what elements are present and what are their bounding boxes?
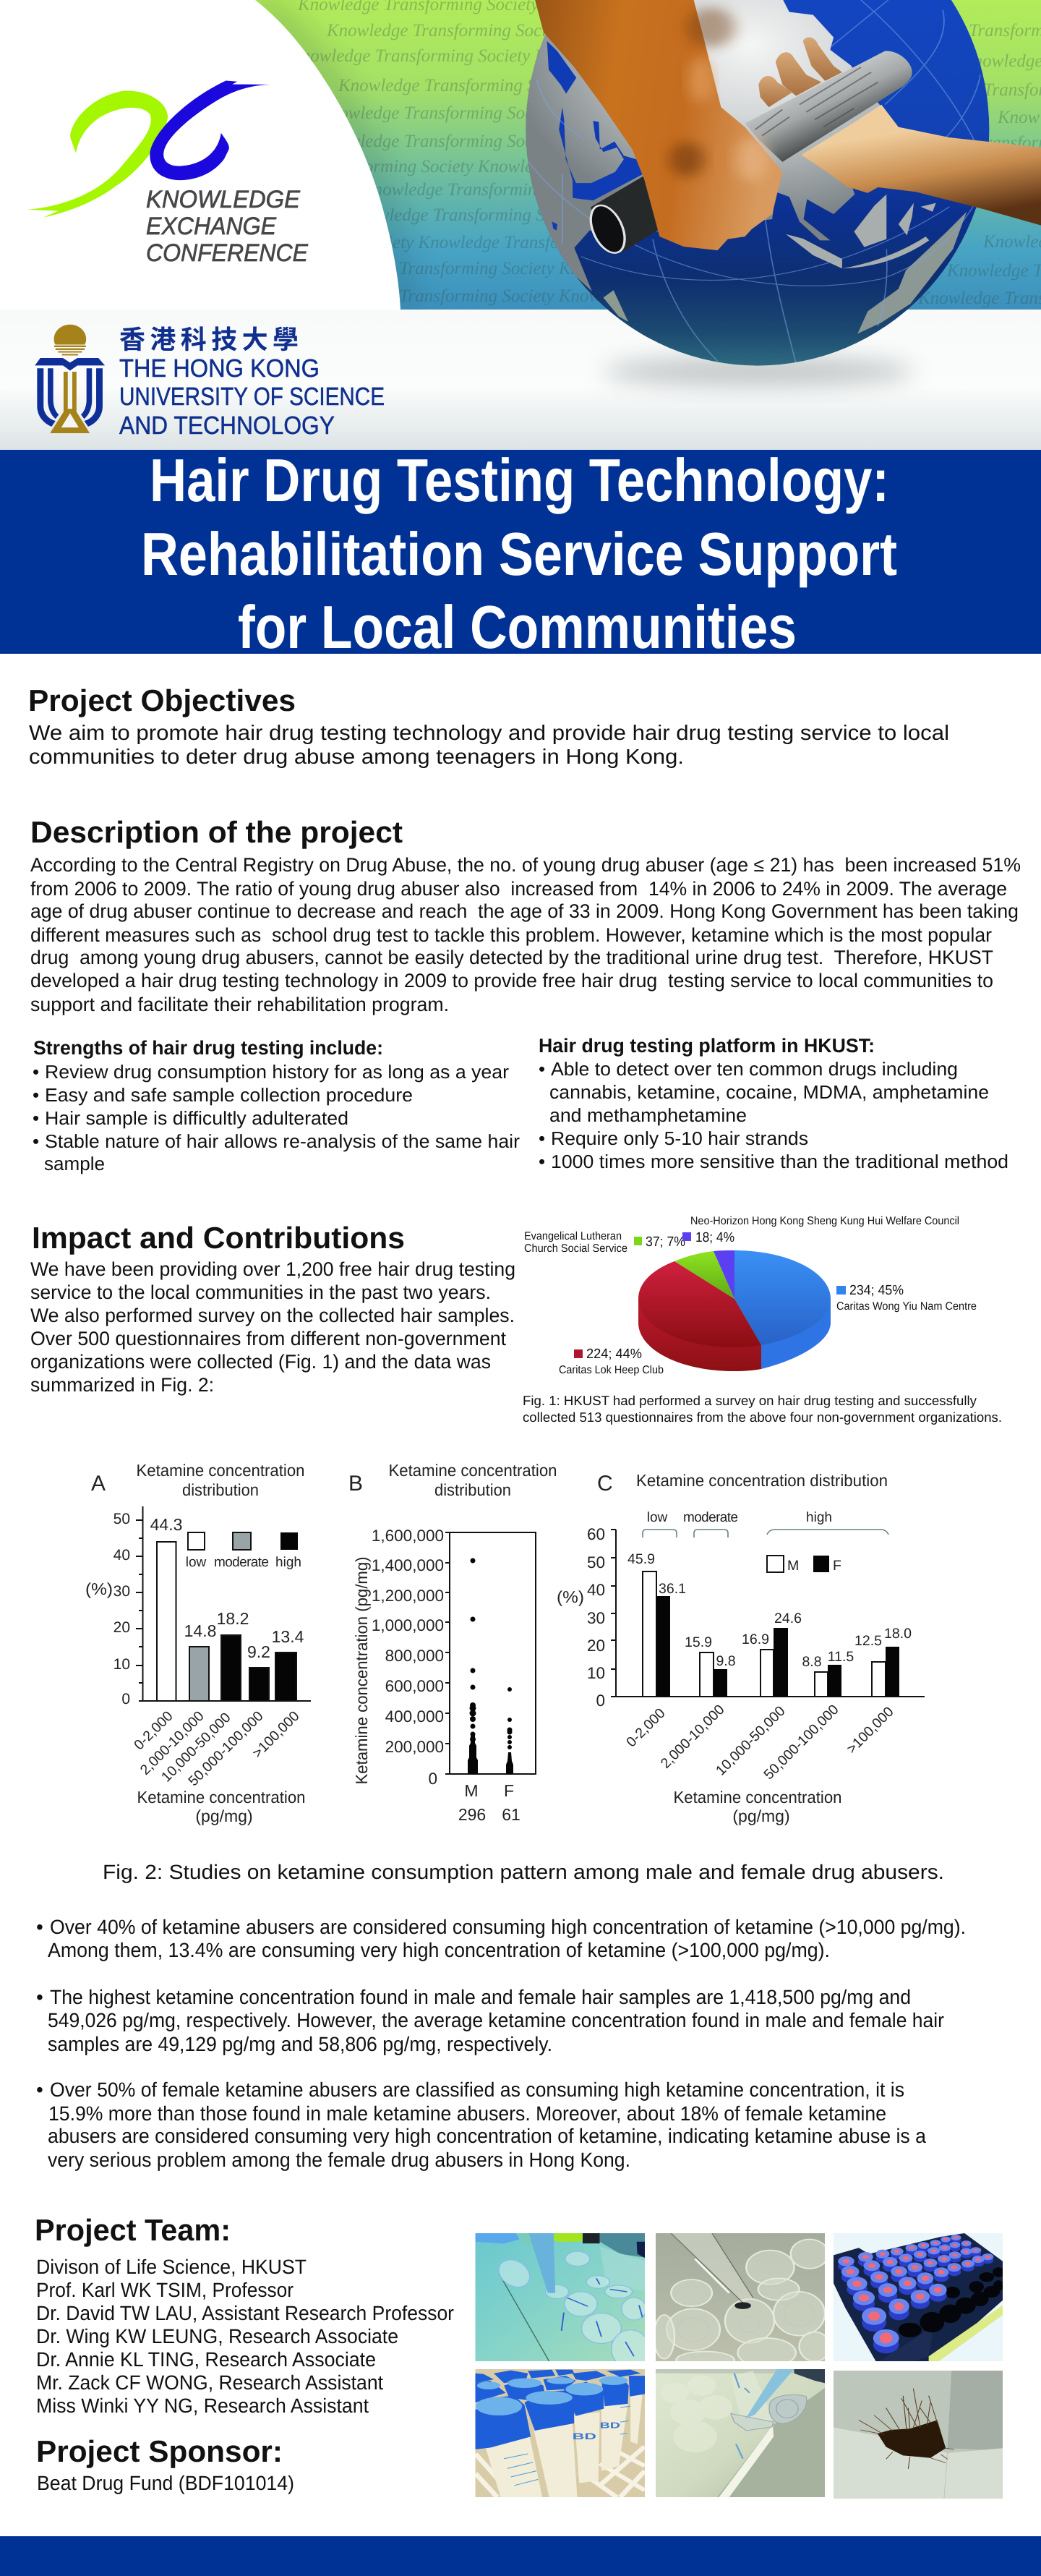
chart A y ticks: 50: [113, 1511, 130, 1527]
chart B y ticks: [372, 1527, 444, 1788]
HKUST name: [119, 325, 385, 440]
chart C brackets: [643, 1530, 888, 1538]
section: project objectives: [28, 683, 949, 769]
section: impact and contributions: Over 500 questionnaires from different non-government: [30, 1328, 506, 1349]
panel: hair drug testing platform in HKUST: and methamphetamine: [549, 1104, 747, 1126]
pie labels: Church Social Service: [524, 1242, 627, 1255]
photo: hair clump on white paper: [834, 2371, 1003, 2499]
chart A legend: [186, 1532, 301, 1570]
pie labels: 234; 45%: [849, 1283, 904, 1298]
chart B y title: Ketamine concentration (pg/mg): [352, 1556, 371, 1785]
section: description of the project: drug among young drug abusers, cannot be easily detected by the traditional urine drug test. Therefore, HKUST: [30, 947, 993, 968]
project team: Miss Winki YY NG, Research Assistant: [36, 2394, 369, 2417]
chart B y ticks: 1,600,000: [372, 1527, 444, 1545]
pie labels: 224; 44%: [586, 1347, 642, 1362]
chart C values: 24.6: [774, 1611, 802, 1626]
project team: Divison of Life Science, HKUST: [36, 2256, 307, 2278]
project team: [35, 2213, 454, 2417]
chart B title: Ketamine concentration: [389, 1461, 557, 1480]
pie labels: Caritas Wong Yiu Nam Centre: [836, 1300, 977, 1313]
chart C female bars: [656, 1596, 899, 1697]
figure 1 caption: collected 513 questionnaires from the above four non-government organizations.: [523, 1409, 1002, 1425]
chart C legend: [767, 1556, 841, 1574]
photo: blue capped centrifuge tubes: BD: [573, 2431, 596, 2441]
findings bullet 2: •: [36, 1986, 43, 2008]
chart A x title: [137, 1788, 305, 1825]
chart A legend: low: [186, 1555, 207, 1570]
panel: strengths of hair drug testing: Easy and safe sample collection procedure: [45, 1084, 413, 1106]
right hand fingers: [758, 37, 842, 107]
chart C x categories: [623, 1702, 897, 1783]
section: impact and contributions: We also performed survey on the collected hair samples.: [30, 1305, 515, 1326]
panel: strengths of hair drug testing: •: [33, 1084, 39, 1106]
title: [141, 446, 897, 661]
section: description of the project: [30, 815, 1021, 1015]
section: description of the project: According to the Central Registry on Drug Abuse, the no. of young drug abuser (age ≤ 21) has been increased 51%: [30, 854, 1021, 876]
photo: dark hair sample in tube caps: [656, 2233, 825, 2361]
HKUST name: UNIVERSITY OF SCIENCE: [119, 383, 385, 411]
chart C y ticks: [557, 1525, 605, 1710]
project sponsor: [36, 2434, 294, 2494]
globe land masses: [520, 0, 967, 333]
chart C y ticks: 20: [587, 1637, 605, 1655]
globe shadow: [604, 357, 914, 386]
chart C y ticks: 60: [587, 1525, 605, 1543]
findings bullet 1: [36, 1916, 966, 1961]
findings bullet 2: [36, 1986, 944, 2055]
chart C bracket labels: high: [806, 1510, 832, 1525]
chart B y ticks: 1,200,000: [372, 1587, 444, 1605]
section: description of the project: from 2006 to 2009. The ratio of young drug abuser also increased from 14% in 2006 to 24% in 2009. The average: [30, 878, 1007, 900]
panel: strengths of hair drug testing: Review drug consumption history for as long as a year: [45, 1061, 509, 1083]
gradient panel with slogan texture: Knowledge Transforming: [361, 180, 546, 200]
chart C axes: [611, 1530, 925, 1697]
pie chart: questionnaires by organization: [524, 1215, 977, 1376]
section: impact and contributions: We have been providing over 1,200 free hair drug testing: [30, 1258, 515, 1280]
chart B title: distribution: [434, 1480, 511, 1499]
chart A values: [150, 1515, 304, 1661]
logo brush strokes: [27, 81, 270, 218]
panel: hair drug testing platform in HKUST: •: [539, 1151, 545, 1172]
chart C x categories: >100,000: [844, 1704, 897, 1757]
chart B x labels: 296: [458, 1805, 486, 1824]
chart C legend: F: [833, 1558, 841, 1574]
chart C values: 11.5: [828, 1649, 854, 1665]
findings bullet 1: •: [36, 1916, 43, 1938]
chart B y ticks: 1,000,000: [372, 1616, 444, 1634]
project team: Dr. Annie KL TING, Research Associate: [36, 2348, 376, 2371]
gradient panel with slogan texture: Knowledge Transforming Society Knowledge: [317, 103, 645, 123]
chart B title: [389, 1461, 557, 1499]
slice: Caritas Wong Yiu Nam Centre: [734, 1250, 831, 1345]
chart A y ticks: (%): [85, 1579, 113, 1598]
logo wordmark: CONFERENCE: [146, 239, 308, 267]
chart A x title: (pg/mg): [195, 1807, 253, 1825]
chart C legend: M: [787, 1558, 799, 1574]
pie labels: Neo-Horizon Hong Kong Sheng Kung Hui Welfare Council: [690, 1215, 959, 1227]
chart B y ticks: 400,000: [385, 1707, 444, 1726]
photo: pipette adding liquid to tube cap: [656, 2369, 825, 2497]
chart B y ticks: 800,000: [385, 1647, 444, 1665]
globe with hands passing a baton: [520, 0, 1041, 366]
chart C y ticks: 40: [587, 1581, 605, 1599]
chart C values: 12.5: [854, 1633, 882, 1649]
pie labels: [524, 1215, 977, 1376]
figure 1 caption: Fig. 1: HKUST had performed a survey on hair drug testing and successfully: [523, 1393, 977, 1408]
chart C x title: (pg/mg): [732, 1807, 790, 1825]
pie side walls: [638, 1299, 831, 1371]
section: impact and contributions: summarized in Fig. 2:: [30, 1374, 214, 1396]
chart A title: distribution: [182, 1480, 259, 1499]
panel: strengths of hair drug testing: Hair sample is difficultly adulterated: [45, 1107, 348, 1129]
slice: Evangelical Lutheran: [674, 1251, 734, 1299]
chart A x categories: 0-2,000: [131, 1708, 176, 1753]
slice: Caritas Lok Heep Club: [638, 1261, 761, 1347]
pie labels: Caritas Lok Heep Club: [559, 1364, 664, 1376]
chart C x categories: 10,000-50,000: [713, 1703, 789, 1778]
panel: strengths of hair drug testing: •: [33, 1061, 39, 1083]
globe sphere: [526, 0, 989, 366]
chart A y ticks: 0: [121, 1691, 130, 1707]
gradient panel with slogan texture: Knowledge Transforming Society: [326, 21, 568, 40]
conference logo: [27, 81, 308, 267]
title: Hair Drug Testing Technology:: [150, 446, 889, 514]
globe grid lines: [526, 0, 984, 364]
slice: Neo-Horizon: [714, 1250, 734, 1299]
findings bullet 2: samples are 49,129 pg/mg and 58,806 pg/mg, respectively.: [48, 2033, 552, 2055]
pie labels: 18; 4%: [695, 1230, 734, 1245]
chart C x title: Ketamine concentration: [674, 1788, 841, 1807]
female data points: [506, 1687, 513, 1774]
findings bullet 3: very serious problem among the female drug abusers in Hong Kong.: [48, 2149, 630, 2171]
chart C: distribution by gender: [557, 1471, 925, 1825]
HKUST name: THE HONG KONG: [119, 354, 320, 383]
chart C bracket labels: moderate: [683, 1510, 738, 1525]
pie labels: Evangelical Lutheran: [524, 1230, 622, 1242]
gradient panel with slogan texture: Transforming Society Knowledge: [399, 259, 640, 278]
chart A values: 44.3: [150, 1515, 182, 1534]
chart B y ticks: 1,400,000: [372, 1556, 444, 1574]
findings bullet 3: abusers are considered consuming very high concentration of ketamine, indicating ketamine abuse is a: [48, 2125, 926, 2147]
gradient panel with slogan texture: Know: [997, 108, 1040, 127]
chart A y ticks: 40: [113, 1547, 130, 1564]
chart B: scatter by gender: [348, 1461, 557, 1824]
logo wordmark: KNOWLEDGE: [146, 186, 300, 213]
chart C values: 45.9: [627, 1551, 655, 1567]
gradient panel with slogan texture: Knowledge Transforming Society: [346, 205, 588, 225]
HKUST emblem: [35, 325, 105, 433]
gradient panel with slogan texture: Transforming Society Knowledge: [399, 286, 640, 306]
section: project objectives: communities to deter drug abuse among teenagers in Hong Kong.: [29, 746, 684, 769]
panel: strengths of hair drug testing: Strengths of hair drug testing include:: [33, 1037, 383, 1059]
figure 2 caption: Fig. 2: Studies on ketamine consumption pattern among male and female drug abusers.: [103, 1861, 944, 1883]
chart C x categories: 0-2,000: [623, 1705, 669, 1750]
chart A: overall ketamine concentration distribution: [85, 1461, 311, 1825]
chart A y ticks: 20: [113, 1619, 130, 1636]
chart C x categories: 2,000-10,000: [658, 1702, 728, 1772]
logo wordmark: [146, 186, 308, 267]
chart C x title: [674, 1788, 841, 1825]
panel: hair drug testing platform in HKUST: •: [539, 1127, 545, 1149]
panel: hair drug testing platform in HKUST: Able to detect over ten common drugs including: [551, 1058, 958, 1080]
chart A y ticks: [85, 1511, 130, 1707]
section: impact and contributions: Impact and Contributions: [32, 1221, 405, 1255]
chart B x labels: 61: [502, 1805, 520, 1824]
chart A x categories: 50,000-100,000: [185, 1708, 267, 1789]
chart C values: 15.9: [685, 1634, 712, 1650]
section: project objectives: We aim to promote hair drug testing technology and provide hair drug testing service to local: [29, 722, 949, 745]
project sponsor: Beat Drug Fund (BDF101014): [37, 2472, 294, 2494]
chart B letter: B: [348, 1472, 363, 1496]
photo grid: laboratory samples: [476, 2233, 1005, 2499]
panel: hair drug testing platform in HKUST: [539, 1035, 1008, 1172]
title: for Local Communities: [238, 593, 797, 661]
figure 1 caption: [523, 1393, 1002, 1425]
chart C letter: C: [597, 1472, 613, 1496]
chart A legend: moderate: [214, 1555, 269, 1570]
gradient panel with slogan texture: Knowledge Transforming Society Knowledge: [288, 46, 616, 66]
chart C values: 8.8: [802, 1654, 822, 1670]
chart C values: 16.9: [742, 1632, 769, 1647]
chart A axes: [136, 1506, 311, 1701]
section: description of the project: Description of the project: [30, 815, 403, 849]
section: description of the project: developed a hair drug testing technology in 2009 to provide free hair drug testing service to local communities to: [30, 970, 993, 991]
chart C y ticks: 0: [596, 1692, 605, 1710]
gradient panel with slogan texture: Transforming Society Knowledge: [318, 157, 559, 176]
title banner: [0, 446, 1041, 661]
chart A legend: high: [275, 1555, 301, 1570]
photo: blue vials in rack: [834, 2233, 1003, 2361]
chart A x title: Ketamine concentration: [137, 1788, 305, 1807]
chart A title: [136, 1461, 305, 1499]
title: Rehabilitation Service Support: [141, 520, 897, 588]
gradient panel with slogan texture: [246, 0, 1041, 310]
chart B y ticks: 200,000: [385, 1738, 444, 1756]
chart A title: Ketamine concentration: [136, 1461, 305, 1480]
chart C values: 36.1: [659, 1581, 686, 1597]
chart C values: 9.8: [716, 1653, 736, 1669]
panel: strengths of hair drug testing: Stable nature of hair allows re-analysis of the same hair: [45, 1130, 520, 1152]
section: impact and contributions: organizations were collected (Fig. 1) and the data was: [30, 1351, 491, 1373]
chart C bracket labels: low: [647, 1510, 668, 1525]
footer band: [0, 2536, 1041, 2576]
panel: hair drug testing platform in HKUST: cannabis, ketamine, cocaine, MDMA, amphetamine: [549, 1081, 989, 1103]
chart B x labels: M: [464, 1781, 479, 1800]
panel: hair drug testing platform in HKUST: •: [539, 1058, 545, 1080]
section: impact and contributions: service to the local communities in the past two years.: [30, 1281, 491, 1303]
photo: pipette over clear caps on teal: [476, 2233, 645, 2361]
HKUST name: AND TECHNOLOGY: [119, 411, 335, 440]
findings bullet 3: Over 50% of female ketamine abusers are classified as consuming high ketamine concentration, it is: [50, 2078, 904, 2101]
gradient panel with slogan texture: Knowledge Transforming Society Knowledge: [338, 76, 665, 95]
findings bullet 2: 549,026 pg/mg, respectively. However, the average ketamine concentration found in male and female hair: [48, 2009, 944, 2031]
chart A values: 13.4: [272, 1627, 304, 1646]
panel: strengths of hair drug testing: •: [33, 1130, 39, 1152]
photo: blue capped centrifuge tubes: BD: [600, 2421, 620, 2430]
chart A values: 18.2: [217, 1609, 249, 1628]
findings bullet 3: •: [36, 2078, 43, 2101]
panel: strengths of hair drug testing: [33, 1037, 520, 1174]
panel: hair drug testing platform in HKUST: Hair drug testing platform in HKUST:: [539, 1035, 875, 1057]
project team: Dr. David TW LAU, Assistant Research Professor: [36, 2302, 454, 2324]
gradient panel with slogan texture: Knowledge Transforming Society: [317, 132, 560, 151]
chart A letter: A: [91, 1472, 106, 1496]
pie labels: 37; 7%: [646, 1234, 685, 1250]
header artwork: [0, 0, 1041, 450]
panel: strengths of hair drug testing: •: [33, 1107, 39, 1129]
chart B x labels: [458, 1781, 520, 1824]
chart C y ticks: 30: [587, 1609, 605, 1627]
chart B frame: [445, 1532, 536, 1774]
chart A values: 14.8: [184, 1621, 216, 1640]
findings bullet 3: [36, 2078, 926, 2171]
chart A y ticks: 10: [113, 1656, 130, 1673]
section: project objectives: Project Objectives: [28, 683, 296, 717]
chart C values: 18.0: [884, 1626, 912, 1642]
HKUST name: 香港科技大學: [119, 325, 299, 354]
project sponsor: Project Sponsor:: [36, 2434, 283, 2468]
project team: Project Team:: [35, 2213, 231, 2247]
section: impact and contributions: [30, 1221, 515, 1396]
section: description of the project: support and facilitate their rehabilitation program.: [30, 994, 449, 1015]
chart C male bars: [643, 1571, 886, 1697]
chart A values: 9.2: [247, 1642, 270, 1661]
baton roll: [585, 51, 912, 255]
header lower band: [0, 310, 1041, 450]
chart C values: [627, 1551, 912, 1670]
logo wordmark: EXCHANGE: [146, 213, 276, 240]
chart C y ticks: 10: [587, 1664, 605, 1682]
chart A bars: [157, 1542, 296, 1701]
chart A x categories: 2,000-10,000: [137, 1708, 207, 1778]
male data points: [468, 1558, 478, 1774]
findings bullet 3: 15.9% more than those found in male ketamine abusers. Moreover, about 18% of female ketamine: [48, 2102, 886, 2125]
panel: strengths of hair drug testing: sample: [44, 1153, 105, 1174]
findings bullet 1: Among them, 13.4% are consuming very high concentration of ketamine (>100,000 pg/mg).: [48, 1939, 830, 1961]
section: description of the project: different measures such as school drug test to tackle this problem. However, ketamine which is the most popular: [30, 924, 992, 946]
chart C y ticks: (%): [557, 1587, 584, 1606]
chart C y ticks: 50: [587, 1553, 605, 1571]
chart A x categories: [131, 1708, 303, 1789]
chart C bracket labels: [647, 1510, 832, 1525]
left arm and fist: [535, 0, 782, 250]
panel: hair drug testing platform in HKUST: 1000 times more sensitive than the traditional method: [551, 1151, 1008, 1172]
left arm shading: [670, 7, 768, 182]
findings bullet 1: Over 40% of ketamine abusers are considered consuming high concentration of ketamine (>10,000 pg/mg).: [50, 1916, 966, 1938]
panel: hair drug testing platform in HKUST: Require only 5-10 hair strands: [551, 1127, 808, 1149]
section: description of the project: age of drug abuser continue to decrease and reach the age of 33 in 2009. Hong Kong Government has been taking: [30, 900, 1019, 922]
chart A y ticks: 30: [113, 1583, 130, 1600]
chart C x categories: 50,000-100,000: [761, 1702, 842, 1783]
chart B x labels: F: [504, 1781, 514, 1800]
right arm and palm: [801, 105, 1041, 226]
HKUST logo: [35, 325, 385, 440]
chart C title: Ketamine concentration distribution: [636, 1471, 888, 1490]
photo: blue capped centrifuge tubes: [476, 2369, 645, 2497]
chart A x categories: 10,000-50,000: [158, 1710, 234, 1785]
project team: Mr. Zack CF WONG, Research Assistant: [36, 2371, 383, 2394]
project team: Dr. Wing KW LEUNG, Research Associate: [36, 2325, 398, 2347]
chart A x categories: >100,000: [249, 1708, 303, 1761]
chart B y ticks: 0: [428, 1770, 437, 1788]
project team: Prof. Karl WK TSIM, Professor: [36, 2279, 294, 2301]
findings bullet 2: The highest ketamine concentration found in male and female hair samples are 1,418,500 pg/mg and: [50, 1986, 911, 2008]
chart B y ticks: 600,000: [385, 1677, 444, 1695]
gradient panel with slogan texture: Society Knowledge Transforming: [361, 233, 602, 252]
